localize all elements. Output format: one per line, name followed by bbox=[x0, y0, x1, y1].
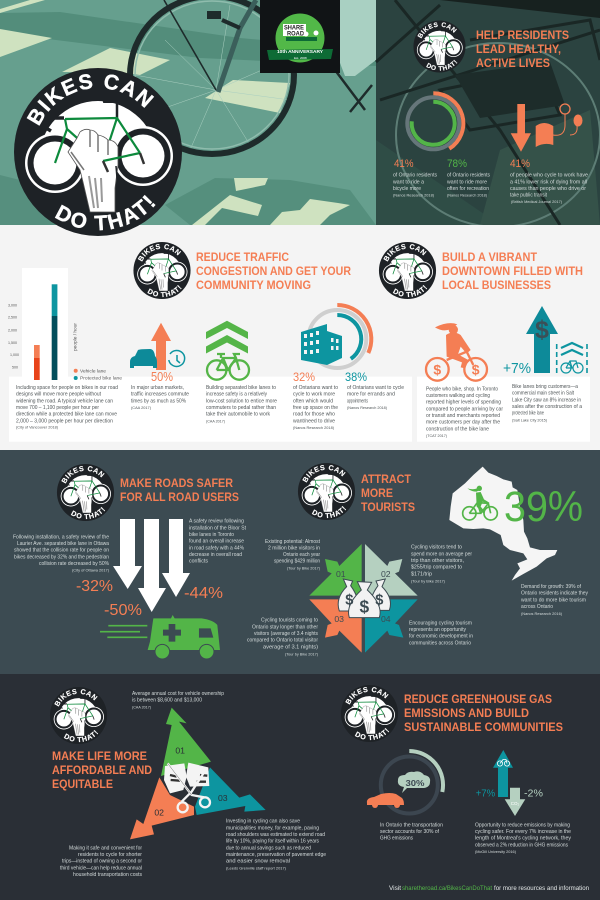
text: tourists stay longer: average of 3.1 nights) bbox=[263, 644, 318, 650]
text: Montreal network bbox=[475, 822, 572, 854]
text: bike lanes bring customers: protected bike lane bbox=[512, 411, 544, 417]
heading: downtown: DOWNTOWN FILLED WITH bbox=[442, 266, 583, 278]
stat: 39%: 39% bbox=[504, 483, 583, 531]
text: demand for growth: (Nanos Research 2016) bbox=[521, 612, 563, 616]
logo: traffic bbox=[133, 242, 191, 299]
text: separated lanes bbox=[206, 385, 277, 423]
stat: -32%: -32% bbox=[76, 578, 113, 595]
text: cycling visitors spend: Cycling visitors tend to bbox=[411, 545, 462, 551]
stat: 41% lower risk: a 41% lower risk of dying from all bbox=[510, 179, 587, 185]
stat: -44%: -44% bbox=[184, 585, 223, 602]
bar chart: people per hour by lane: 500 bbox=[12, 366, 18, 370]
text: Laurier Ave: bikes decreased by 32% and the pedestrian bbox=[14, 554, 109, 560]
heading: traffic: REDUCE TRAFFIC bbox=[196, 252, 289, 264]
stat: 32%: often which would bbox=[293, 398, 333, 404]
logo: health bbox=[414, 20, 466, 72]
text: Laurier Ave: collision rate decreased by 50% bbox=[39, 561, 110, 567]
text: demand for growth: Ontario residents indicate they bbox=[521, 591, 588, 597]
bar chart: people per hour by lane bbox=[8, 268, 122, 381]
text: tourists stay longer: compared to Ontario total visitor bbox=[247, 638, 318, 644]
diagram: triangle of three savings: 03 bbox=[218, 793, 228, 803]
text: lane capacity: 2,000 – 3,000 people per hour per direction bbox=[16, 418, 113, 424]
logo: traffic: BIKES CAN bbox=[138, 244, 182, 262]
stat: 32%: 32% bbox=[293, 370, 315, 384]
icon: cyclist with dollar wheels bbox=[426, 323, 487, 381]
diagram: four tourism benefits: 02 bbox=[381, 569, 391, 579]
stat: 41% want to ride: bicycle more bbox=[393, 186, 421, 192]
stat: 78% ride for recreation: (Nanos Research 2018) bbox=[447, 193, 488, 197]
heading: traffic: CONGESTION AND GET YOUR bbox=[196, 266, 352, 278]
text: commute bbox=[131, 385, 189, 410]
bicycle front wheel photo bbox=[130, 0, 294, 154]
text: commute: times by as much as 50% bbox=[131, 398, 187, 404]
heading: downtown: LOCAL BUSINESSES bbox=[442, 280, 551, 292]
icon: orange car bbox=[367, 793, 404, 808]
stat: 38% bbox=[345, 370, 404, 410]
ring chart: 32% and 38% bbox=[308, 305, 371, 368]
footer: visit link: Visit bbox=[389, 885, 401, 892]
logo: traffic: DO THAT! bbox=[147, 285, 182, 298]
logo: downtown bbox=[378, 242, 436, 299]
icon: pale down arrow with CO2 bbox=[505, 788, 525, 816]
stat: 38%: appointments bbox=[347, 398, 368, 404]
icon: car bbox=[130, 349, 157, 368]
diagram: four tourism benefits: 01 bbox=[336, 569, 346, 579]
text: Montreal network: (McGill University 2016) bbox=[475, 850, 517, 854]
stat: 38%: more for errands and bbox=[347, 392, 395, 398]
icon: bike lane bbox=[557, 343, 587, 373]
icon: three white down arrows bbox=[113, 519, 190, 612]
text: tourists stay longer: visitors (average of 3.4 nights bbox=[254, 631, 318, 637]
logo: main Bikes Can Do That badge: DO THAT! bbox=[54, 194, 156, 230]
text: existing potential: Ontario each year bbox=[283, 552, 320, 558]
footer: visit link bbox=[389, 885, 590, 892]
text: tourists stay longer: (Tour by Bike 2017) bbox=[285, 652, 319, 656]
logo: tourists: DO THAT! bbox=[312, 506, 346, 518]
text: separated lanes: take their automobile to work bbox=[206, 412, 270, 418]
stat: +7%: +7% bbox=[476, 789, 495, 800]
icon: clock bbox=[169, 350, 185, 366]
stat: +7%: +7% bbox=[503, 360, 531, 377]
heading: roads: FOR ALL ROAD USERS bbox=[120, 492, 239, 504]
text: bike lanes bring customers: commercial main street in Salt bbox=[512, 391, 575, 397]
text: Montreal network: length of Montreal's cycling network, they bbox=[475, 836, 572, 842]
text: Montreal network: observed a 2% reduction in GHG emissions bbox=[475, 842, 568, 848]
heading: health: LEAD HEALTHY, bbox=[476, 44, 561, 56]
heading: tourists: TOURISTS bbox=[361, 502, 415, 514]
logo: downtown: DO THAT! bbox=[392, 285, 428, 298]
stat: 41% want to ride: (Nanos Research 2018) bbox=[393, 193, 435, 197]
icon: buildings bbox=[301, 324, 342, 365]
stat: 41% lower risk: (British Medical Journal 2017) bbox=[511, 200, 563, 204]
stat: 32%: want/need to drive bbox=[293, 418, 335, 424]
heading: greenhouse gas: EMISSIONS AND BUILD bbox=[404, 708, 529, 720]
panel: downtown white text card bbox=[417, 377, 590, 442]
stat: 41% want to ride: 41% bbox=[394, 158, 414, 170]
text: commute: traffic increases commute bbox=[131, 392, 189, 398]
text: Montreal network: cycling safer. For every 7% increase in the bbox=[475, 829, 571, 835]
stat: 32%: of Ontarians want to bbox=[293, 385, 338, 391]
text: lane capacity: widening the road. A typical vehicle lane can bbox=[16, 398, 113, 404]
stat: -2%: -2% bbox=[524, 789, 543, 800]
logo: affordable: BIKES CAN bbox=[54, 689, 98, 706]
heading: health bbox=[476, 30, 569, 70]
icon: teal up arrow with bike bbox=[493, 750, 513, 797]
text: economic development: for economic development in bbox=[409, 634, 473, 640]
stat: 41% want to ride: want to ride a bbox=[393, 179, 424, 185]
text: people who bike shop bbox=[426, 386, 503, 438]
text: Laurier Ave: showed that the collision rate for people on bbox=[14, 548, 109, 554]
stat: 41% lower risk: take public transit bbox=[510, 193, 548, 199]
stat: 38%: (Nanos Research 2018) bbox=[347, 406, 388, 410]
stat: 41% lower risk: of people who cycle to work have bbox=[510, 173, 588, 179]
text: municipal savings bbox=[226, 819, 326, 870]
diagram: triangle of three savings: 01 bbox=[175, 746, 185, 756]
bar chart: people per hour by lane: 2,500 bbox=[8, 316, 17, 320]
bar chart: people per hour by lane: 1,000 bbox=[10, 353, 19, 357]
stat: -50%: -50% bbox=[104, 602, 142, 619]
logo: tourists bbox=[298, 463, 355, 520]
stat: 78% ride for recreation: 78% bbox=[447, 158, 467, 170]
logo: health: DO THAT! bbox=[426, 60, 458, 71]
heading: traffic bbox=[196, 252, 352, 292]
logo: main Bikes Can Do That badge bbox=[14, 68, 182, 236]
text: cycling visitors spend: $255/trip compared to bbox=[411, 565, 462, 571]
text: municipal savings: life by 10%, paying for itself within 16 years bbox=[226, 839, 319, 845]
logo: affordable bbox=[50, 687, 107, 744]
text: lane capacity bbox=[16, 385, 118, 430]
stat: 41% lower risk bbox=[510, 158, 588, 204]
bar chart: people per hour by lane: people / hour bbox=[72, 322, 78, 351]
text: transportation emissions: In Ontario the transportation bbox=[380, 822, 443, 828]
text: people who bike shop: People who bike, shop. In Toronto bbox=[426, 386, 498, 392]
text: household costs: Making it safe and convenient for bbox=[69, 845, 142, 851]
diagram: triangle of three savings: 02 bbox=[154, 807, 164, 817]
text: demand for growth: Demand for growth: 39% of bbox=[521, 584, 582, 590]
text: existing potential bbox=[265, 539, 321, 570]
text: lane capacity: Including space for people on bikes in our road bbox=[16, 385, 118, 391]
text: bike lanes bring customers: Lake City saw an 8% increase in bbox=[512, 397, 581, 403]
text: Montreal network: Opportunity to reduce emissions by making bbox=[475, 822, 570, 828]
text: transportation emissions: GHG emissions bbox=[380, 836, 413, 842]
text: economic development: Encouraging cycling tourism bbox=[409, 620, 472, 626]
text: bike lanes bring customers bbox=[512, 384, 582, 422]
text: transportation emissions bbox=[380, 822, 443, 842]
stat: 32% bbox=[293, 370, 338, 430]
logo: downtown: BIKES CAN bbox=[383, 244, 427, 262]
logo: roads: BIKES CAN bbox=[61, 466, 105, 484]
heading: roads: MAKE ROADS SAFER bbox=[120, 478, 234, 490]
logo: health: BIKES CAN bbox=[417, 22, 457, 38]
stat: 32%: road for those who bbox=[293, 412, 335, 418]
panel: affordability and emissions section background bbox=[0, 674, 600, 900]
stat: 78% ride for recreation bbox=[447, 158, 490, 197]
icon: up arrow bbox=[151, 323, 171, 370]
logo card: Share the Road 10th anniversary bbox=[260, 0, 340, 73]
map: Ontario with cyclist bbox=[449, 467, 557, 581]
text: vehicle ownership cost: is between $8,600 and $13,000 bbox=[132, 698, 202, 704]
heading: roads bbox=[120, 478, 239, 504]
text: separated lanes: increase safety is a relatively bbox=[206, 392, 267, 398]
logo: roads bbox=[57, 464, 114, 521]
text: bike lanes bring customers: Bike lanes bring customers—a bbox=[512, 384, 578, 390]
heading: affordable: AFFORDABLE AND bbox=[52, 765, 152, 777]
diagram: triangle of three savings bbox=[130, 708, 266, 839]
heading: greenhouse gas bbox=[404, 694, 563, 734]
stat: 38%: 38% bbox=[345, 370, 367, 384]
logo card: Share the Road 10th anniversary: 10th ANNIVERSARY bbox=[277, 49, 323, 54]
icon: ambulance bbox=[100, 615, 220, 659]
text: people who bike shop: construction of the bike lane bbox=[426, 426, 489, 432]
text: people who bike shop: customers walking and cycling bbox=[426, 393, 490, 399]
stat: 38%: of Ontarians want to cycle bbox=[347, 385, 404, 391]
panel: traffic and downtown section background bbox=[0, 225, 600, 450]
heading: tourists: ATTRACT bbox=[361, 474, 411, 486]
text: municipal savings: road shoulders was estimated to extend road bbox=[226, 832, 325, 838]
logo: tourists: BIKES CAN bbox=[302, 465, 346, 482]
text: Bloor St: in road safety with a 44% bbox=[189, 545, 245, 551]
text: people who bike shop: more customers per day after the bbox=[426, 420, 500, 426]
text: cycling visitors spend: (Tour by Bike 2017) bbox=[411, 579, 446, 583]
icon: cyclist with dollar wheels: $ bbox=[433, 361, 441, 377]
diagram: four tourism benefits: $ bbox=[360, 596, 370, 616]
icon: down arrow bbox=[511, 104, 531, 152]
text: Laurier Ave: Following installation, a safety review of the bbox=[13, 534, 109, 540]
stat: 41% lower risk: 41% bbox=[510, 158, 530, 170]
stat: 32%: (Nanos Research 2018) bbox=[293, 426, 335, 430]
text: existing potential: 2 million bike visitors in bbox=[268, 545, 320, 551]
text: Laurier Ave: (City of Ottawa 2017) bbox=[72, 569, 110, 573]
text: household costs: trips—instead of owning a second or bbox=[62, 859, 142, 865]
text: cycling visitors spend: spend more on average per bbox=[411, 551, 472, 557]
text: cycling visitors spend: trip than other visitors, bbox=[411, 558, 464, 564]
logo: greenhouse gas: BIKES CAN bbox=[345, 687, 389, 704]
panel: traffic white text card bbox=[9, 377, 412, 442]
text: household costs bbox=[60, 845, 142, 878]
text: Laurier Ave: Laurier Ave. separated bike lane in Ottawa bbox=[17, 541, 109, 547]
stat: 32%: cycle to work more bbox=[293, 392, 335, 398]
text: people who bike shop: (TCAT 2017) bbox=[426, 434, 448, 438]
icon: emission cloud with 30%: 30% bbox=[406, 779, 424, 788]
heading: affordable: EQUITABLE bbox=[52, 779, 113, 791]
text: vehicle ownership cost: (CAA 2017) bbox=[132, 705, 152, 709]
icon: chevrons and bicycle bbox=[206, 321, 249, 380]
text: household costs: household transportation costs bbox=[73, 872, 142, 878]
text: economic development bbox=[409, 620, 473, 646]
logo card: Share the Road 10th anniversary: Est. 2008 bbox=[294, 56, 307, 60]
panel: hero photo background bbox=[0, 0, 376, 225]
text: tourists stay longer: Cycling tourists coming to bbox=[261, 618, 318, 624]
logo: main Bikes Can Do That badge: BIKES CAN bbox=[26, 74, 154, 126]
text: bike lanes bring customers: (Salt Lake City 2015) bbox=[512, 418, 548, 422]
ring chart: 41% and 78% bbox=[407, 93, 463, 149]
heading: affordable: MAKE LIFE MORE bbox=[52, 751, 147, 763]
icon: pale down arrow with CO2: CO₂ bbox=[511, 801, 520, 806]
icon: blood pressure cuff bbox=[536, 104, 582, 147]
diagram: four tourism benefits bbox=[309, 544, 418, 653]
text: bike lanes bring customers: sales after the construction of a bbox=[512, 404, 582, 410]
stat: 78% ride for recreation: of Ontario residents bbox=[447, 173, 490, 179]
text: demand for growth: want to do more bike tourism bbox=[521, 597, 586, 603]
text: Bloor St bbox=[189, 519, 247, 565]
icon: teal arrow with dollar bbox=[526, 306, 558, 373]
text: municipal savings: maintenance, preservation of pavement edge bbox=[226, 852, 326, 858]
diagram: four tourism benefits: 04 bbox=[381, 614, 391, 624]
stat: 41% want to ride bbox=[393, 158, 437, 197]
text: municipal savings: (Leeds Grenville staff report 2017) bbox=[226, 866, 287, 870]
text: lane capacity: designs will move more people without bbox=[16, 392, 102, 398]
icon: teal arrow with dollar: $ bbox=[535, 316, 549, 344]
ring chart: 30% bbox=[381, 751, 443, 814]
text: economic development: represents an opportunity bbox=[409, 627, 467, 633]
heading: tourists bbox=[361, 474, 415, 514]
logo: affordable: DO THAT! bbox=[64, 730, 98, 742]
diagram: four tourism benefits: $ bbox=[375, 592, 383, 608]
bar chart: people per hour by lane: 3,000 bbox=[8, 304, 17, 308]
heading: traffic: COMMUNITY MOVING bbox=[196, 280, 311, 292]
stat: 32%: free up space on the bbox=[293, 405, 338, 411]
text: municipal savings: Investing in cycling can also save bbox=[226, 819, 300, 825]
text: Laurier Ave bbox=[13, 534, 110, 573]
heading: tourists: MORE bbox=[361, 488, 393, 500]
logo: roads: DO THAT! bbox=[70, 507, 106, 520]
text: separated lanes: commuters to pedal rather than bbox=[206, 405, 276, 411]
text: separated lanes: low-cost solution to entice more bbox=[206, 398, 277, 404]
text: Bloor St: A safety review following bbox=[189, 519, 244, 525]
text: tourists stay longer bbox=[247, 618, 319, 656]
text: cycling visitors spend bbox=[411, 545, 472, 583]
text: existing potential: spending $429 million bbox=[274, 559, 320, 565]
logo card: Share the Road 10th anniversary: ROAD bbox=[287, 32, 305, 38]
text: municipal savings: and easier snow removal bbox=[226, 859, 290, 865]
text: existing potential: Existing potential: Almost bbox=[265, 539, 321, 545]
panel: road safety and tourism section background bbox=[0, 450, 600, 674]
text: tourists stay longer: Ontario stay longer than other bbox=[252, 624, 318, 630]
text: municipal savings: municipalities money, for example, paving bbox=[226, 825, 319, 831]
heading: downtown bbox=[442, 252, 583, 292]
panel: health section dark photo background bbox=[376, 0, 600, 227]
heading: health: HELP RESIDENTS bbox=[476, 30, 569, 42]
bar chart: people per hour by lane: Protected bike lane bbox=[80, 376, 122, 381]
text: demand for growth: across Ontario bbox=[521, 604, 553, 610]
logo card: Share the Road 10th anniversary: SHARE bbox=[284, 26, 304, 32]
text: municipal savings: due to annual savings such as reduced bbox=[226, 845, 311, 851]
text: demand for growth bbox=[521, 584, 588, 616]
text: existing potential: (Tour by Bike 2017) bbox=[287, 566, 321, 570]
footer: visit link: sharetheroad.ca/BikesCanDoThat bbox=[402, 885, 492, 892]
text: vehicle ownership cost bbox=[132, 691, 224, 709]
bar chart: people per hour by lane: Vehicle lane bbox=[80, 368, 106, 373]
text: Bloor St: found an overall increase bbox=[189, 539, 244, 545]
text: Bloor St: bike lanes in Toronto bbox=[189, 532, 234, 538]
text: commute: In major urban markets, bbox=[131, 385, 184, 391]
text: people who bike shop: reported higher levels of spending bbox=[426, 400, 501, 406]
stat: 41% lower risk: causes than people who drive or bbox=[510, 186, 586, 192]
stat: 78% ride for recreation: often for recreation bbox=[447, 186, 489, 192]
bar chart: people per hour by lane: 2,000 bbox=[8, 328, 17, 332]
footer: visit link: for more resources and information bbox=[494, 885, 590, 892]
text: lane capacity: move 700 – 1,100 people per hour per bbox=[16, 405, 99, 411]
icon: cyclist with dollar wheels: $ bbox=[472, 361, 480, 377]
text: commute: (CAA 2017) bbox=[131, 406, 152, 410]
text: Bloor St: decrease in overall road bbox=[189, 552, 242, 558]
text: household costs: residents to cycle for shorter bbox=[78, 852, 142, 858]
stat: 50%: 50% bbox=[151, 369, 173, 384]
text: vehicle ownership cost: Average annual cost for vehicle ownership bbox=[132, 691, 224, 697]
text: lane capacity: direction while a protected bike lane can move bbox=[16, 412, 117, 418]
text: Bloor St: conflicts bbox=[189, 559, 209, 565]
logo: greenhouse gas bbox=[341, 685, 398, 742]
logo: greenhouse gas: DO THAT! bbox=[354, 728, 390, 740]
panel: help residents lead healthy active lives bbox=[393, 20, 588, 204]
text: household costs: third vehicle—can help reduce annual bbox=[60, 865, 142, 871]
heading: downtown: BUILD A VIBRANT bbox=[442, 252, 537, 264]
heading: affordable bbox=[52, 751, 152, 791]
text: separated lanes: (CAA 2017) bbox=[206, 419, 226, 423]
bar chart: people per hour by lane: 1,500 bbox=[8, 341, 17, 345]
diagram: four tourism benefits: $ bbox=[345, 592, 353, 608]
text: cycling visitors spend: $171/trip bbox=[411, 571, 432, 577]
text: separated lanes: Building separated bike lanes to bbox=[206, 385, 276, 391]
text: economic development: communities across Ontario bbox=[409, 640, 471, 646]
icon: emission cloud with 30% bbox=[398, 771, 430, 793]
heading: greenhouse gas: SUSTAINABLE COMMUNITIES bbox=[404, 722, 563, 734]
text: transportation emissions: sector accounts for 30% of bbox=[380, 829, 440, 835]
heading: health: ACTIVE LIVES bbox=[476, 58, 550, 70]
stat: 78% ride for recreation: want to ride more bbox=[447, 179, 487, 185]
text: lane capacity: (City of Vancouver 2018) bbox=[16, 426, 59, 430]
stat: 41% want to ride: of Ontario residents bbox=[393, 173, 437, 179]
text: people who bike shop: or transit and merchants reported bbox=[426, 413, 500, 419]
heading: greenhouse gas: REDUCE GREENHOUSE GAS bbox=[404, 694, 552, 706]
text: people who bike shop: compared to people arriving by car bbox=[426, 406, 503, 412]
text: Bloor St: installation of the Bloor St bbox=[189, 525, 247, 531]
diagram: four tourism benefits: 03 bbox=[334, 614, 344, 624]
